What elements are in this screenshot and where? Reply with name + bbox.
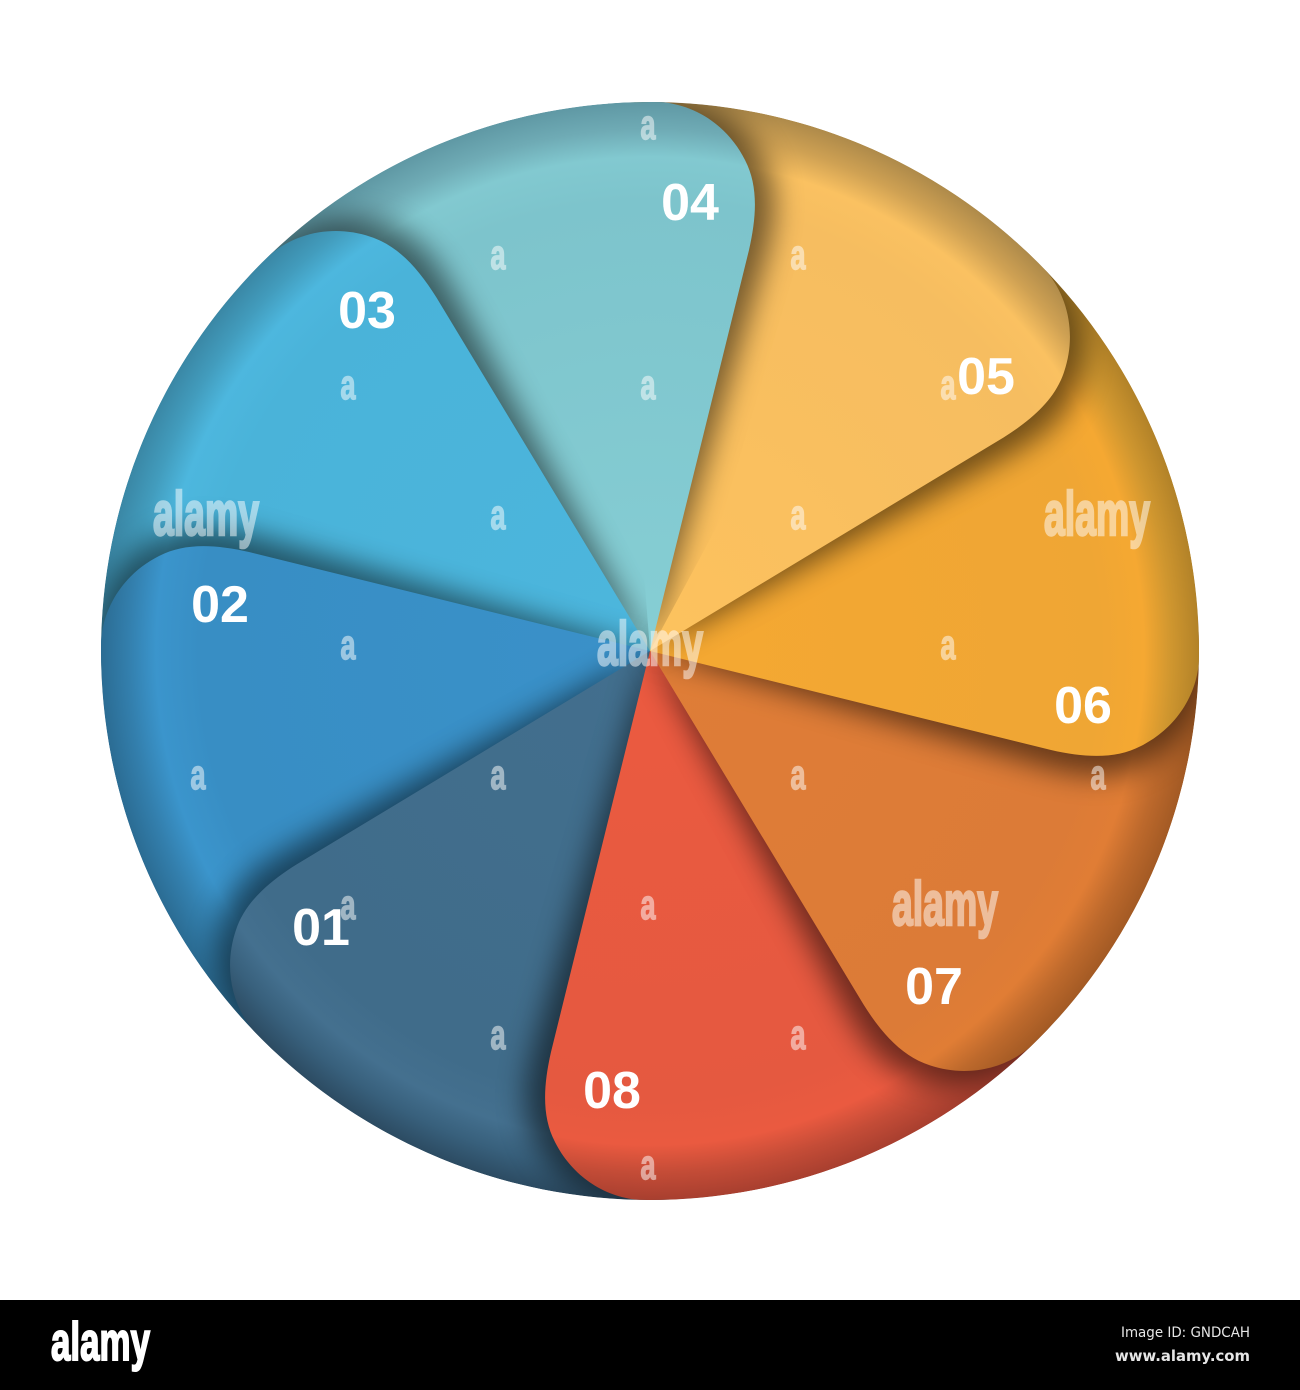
circular pie chart with eight overlapping petals <box>101 102 1199 1200</box>
number labels: 08 <box>583 1062 641 1120</box>
number labels: 05 <box>957 348 1015 406</box>
watermark letter grid: a <box>790 231 806 278</box>
segment 04 overlap: teal edge over yellow <box>608 102 794 650</box>
number labels: 06 <box>1054 677 1112 735</box>
segment 04 base: teal <box>248 102 665 651</box>
footer logo: alamy <box>51 1312 150 1372</box>
watermark letter grid: a <box>790 1011 806 1058</box>
watermark letter grid: a <box>340 621 356 668</box>
watermark letter grid: a <box>340 881 356 928</box>
number labels: 07 <box>905 958 963 1016</box>
segment 03: light blue <box>101 200 650 670</box>
watermark wordmarks: alamy <box>597 610 703 679</box>
watermark letter grid: a <box>940 361 956 408</box>
footer bar <box>0 1300 1300 1390</box>
number labels: 04 <box>661 174 719 232</box>
watermark letter grid: a <box>640 101 656 148</box>
watermark wordmarks: alamy <box>892 870 998 939</box>
watermark letter grid: a <box>1090 751 1106 798</box>
watermark letter grid <box>190 101 1106 1188</box>
watermark letter grid: a <box>940 621 956 668</box>
segment 01: slate blue <box>200 646 669 1200</box>
watermark letter grid: a <box>790 491 806 538</box>
number labels: 02 <box>191 576 249 634</box>
number labels: 01 <box>292 899 350 957</box>
number labels: 03 <box>338 282 396 340</box>
watermark wordmarks: alamy <box>153 480 259 549</box>
watermark letter grid: a <box>340 361 356 408</box>
watermark letter grid: a <box>490 1011 506 1058</box>
watermark letter grid: a <box>190 751 206 798</box>
segment 02: blue <box>97 522 655 1052</box>
watermark letter grid: a <box>640 881 656 928</box>
watermark letter grid: a <box>790 751 806 798</box>
watermark letter grid: a <box>640 361 656 408</box>
watermark letter grid: a <box>490 231 506 278</box>
number labels <box>191 174 1112 1120</box>
watermark wordmarks: alamy <box>1044 480 1150 549</box>
segment 06: orange <box>645 250 1203 780</box>
segment 07: dark orange <box>644 632 1199 1102</box>
watermark letter grid: a <box>490 491 506 538</box>
watermark letter grid: a <box>490 751 506 798</box>
segment 05: yellow <box>631 102 1101 657</box>
watermark letter grid: a <box>640 1141 656 1188</box>
segment 08: red <box>521 646 1052 1204</box>
image id: Image ID: GNDCAH <box>1121 1325 1250 1341</box>
website: www.alamy.com <box>1115 1347 1250 1365</box>
watermark wordmarks <box>153 480 1150 939</box>
